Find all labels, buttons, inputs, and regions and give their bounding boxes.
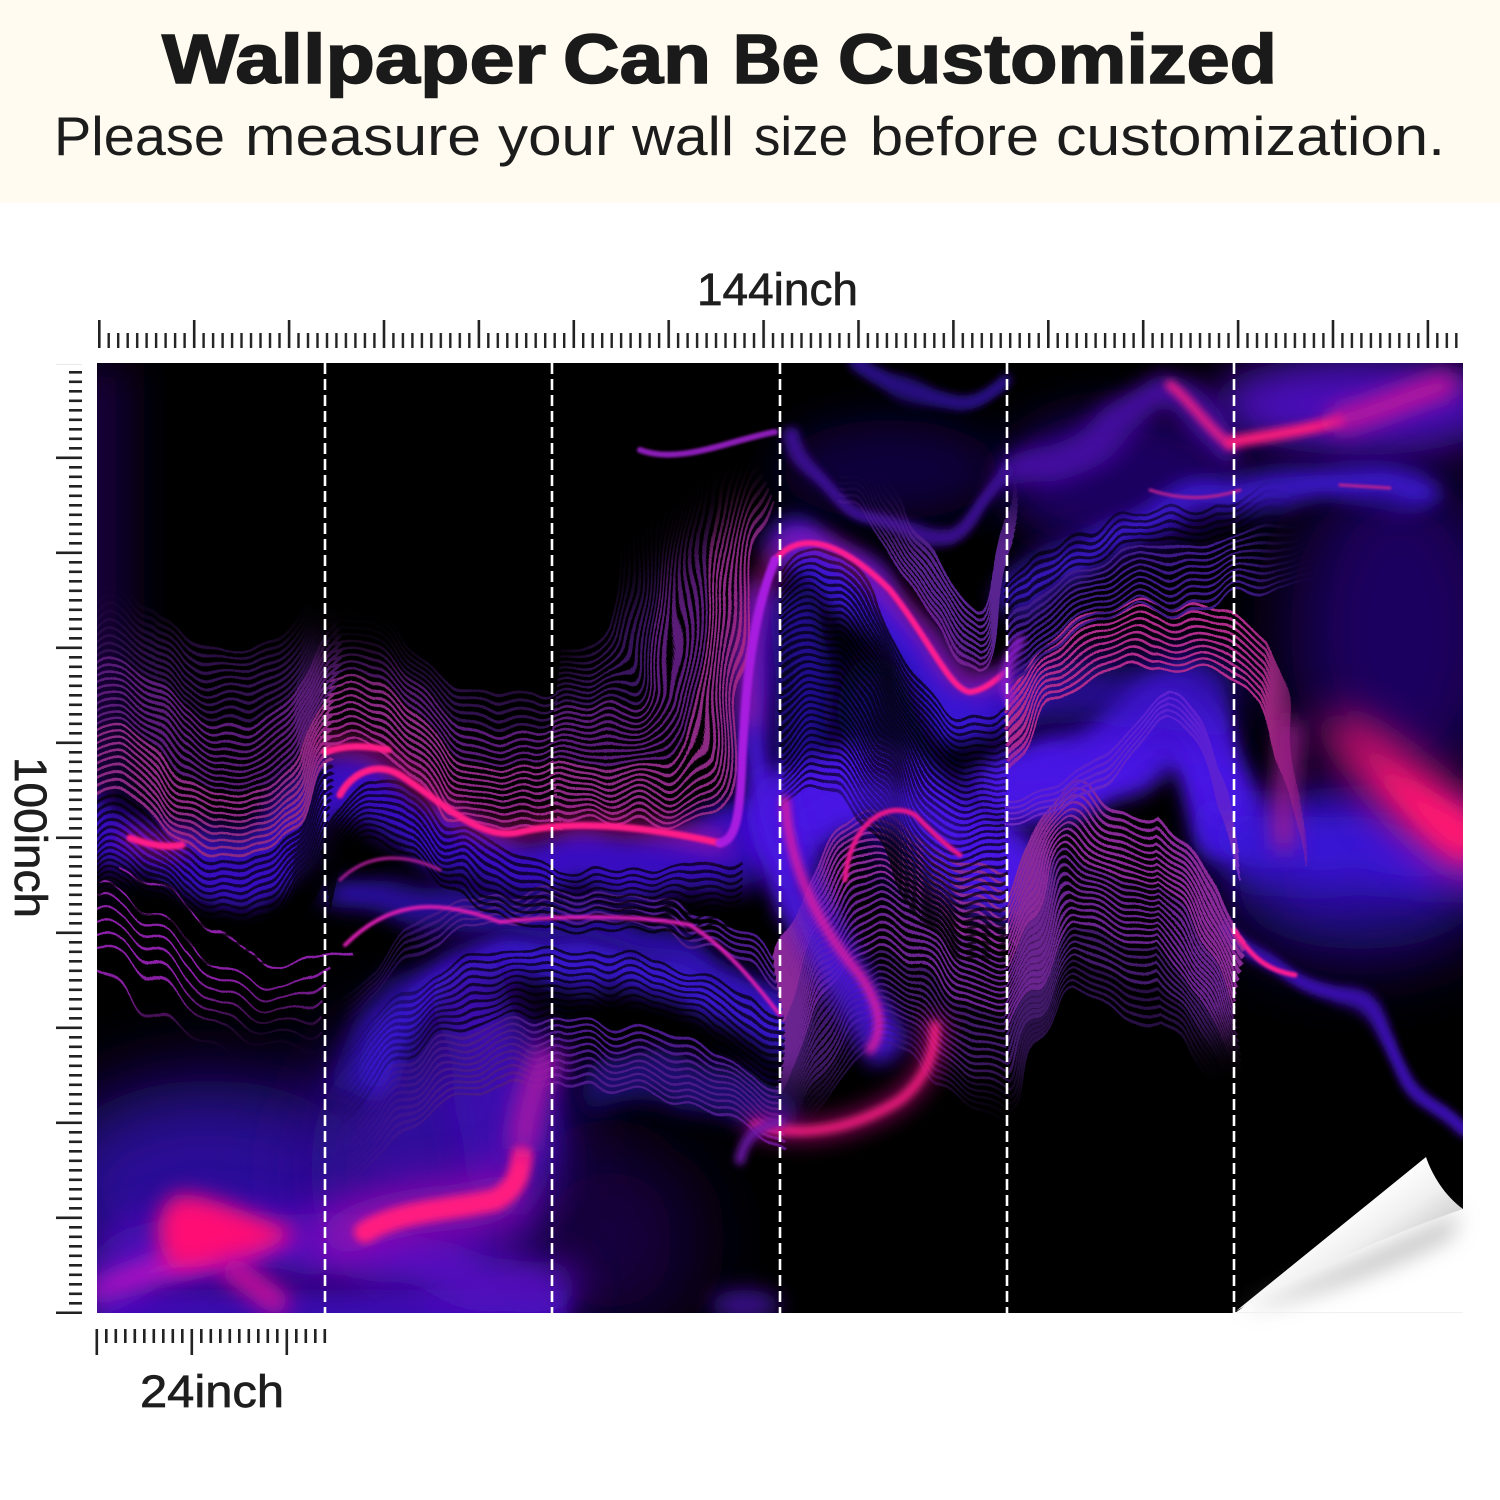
title: Customized (838, 20, 1277, 98)
height label: 100inch (5, 757, 56, 918)
subtitle: your (498, 105, 615, 167)
subtitle: before (870, 105, 1039, 167)
subtitle (54, 105, 1445, 167)
subtitle: size (754, 105, 848, 167)
subtitle: Please (54, 105, 225, 167)
lower band line texture (348, 885, 787, 1150)
subtitle: customization. (1056, 105, 1445, 167)
blue and violet bands (97, 368, 1470, 1285)
soft background glows (40, 355, 1500, 1340)
pink glows (90, 710, 1490, 1308)
subtitle: measure (245, 105, 481, 167)
wavy line texture: coloured lines (97, 474, 1308, 1114)
title: Can (563, 20, 711, 98)
magenta ridges (130, 385, 1445, 1160)
width label: 144inch (697, 264, 858, 315)
left ruler (56, 364, 82, 1314)
wavy line texture: dark lines over bands (97, 483, 1274, 966)
bottom ruler (96, 1329, 328, 1356)
panel width label: 24inch (140, 1366, 284, 1417)
subtitle: wall (631, 105, 734, 167)
wallpaper artwork (97, 363, 1463, 1313)
header band (0, 0, 1500, 203)
title (162, 20, 1277, 98)
peeled corner (1235, 1157, 1470, 1320)
title: Be (733, 20, 819, 98)
panel seam dashed lines (325, 363, 1234, 1313)
title: Wallpaper (162, 20, 546, 98)
violet bands over line texture (770, 705, 1225, 1040)
top ruler (98, 320, 1464, 349)
